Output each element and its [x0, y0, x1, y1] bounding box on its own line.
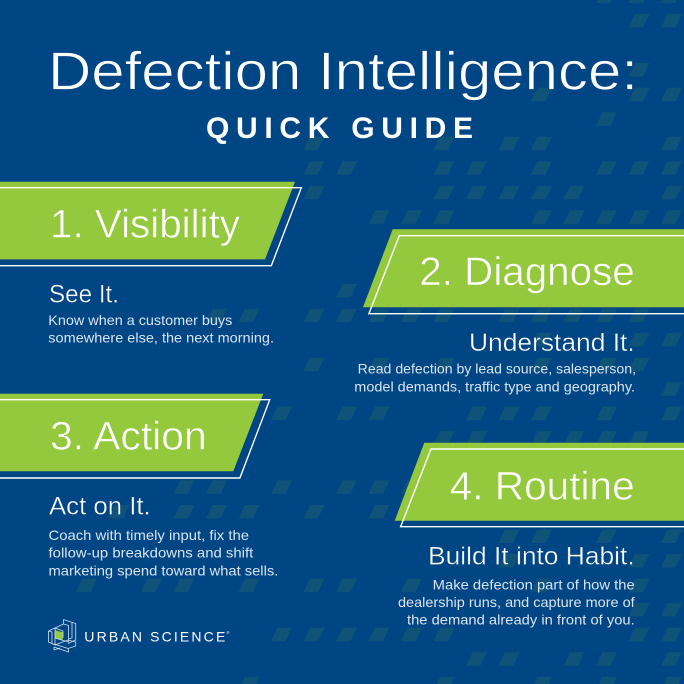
heading: 3. Action: 3. Action [50, 414, 207, 458]
banner: action [0, 394, 270, 478]
icon: Urban Science mark [48, 620, 76, 652]
banner: diagnose [363, 229, 684, 314]
registered mark: ® [226, 630, 230, 635]
body text: diagnose [354, 361, 636, 394]
heading: 2. Diagnose: 2. Diagnose [419, 250, 635, 294]
heading: 1. Visibility: 1. Visibility [50, 202, 240, 246]
subheading: Build It into Habit.: Build It into Habit. [428, 542, 635, 570]
subtitle: QUICK GUIDE [206, 112, 473, 145]
body text: routine [398, 576, 635, 628]
body text: routine: Make defection part of how the [433, 576, 635, 592]
body text: action [48, 527, 278, 578]
body text: routine: the demand already in front of you. [407, 612, 635, 628]
panel: 2. Diagnose [354, 229, 684, 394]
body text: action: follow-up breakdowns and shift [48, 545, 253, 561]
heading: 4. Routine: 4. Routine [450, 464, 635, 508]
body text: diagnose: Read defection by lead source, salesperson, [358, 361, 636, 377]
body text: visibility: somewhere else, the next morning. [48, 330, 274, 346]
wordmark: URBAN SCIENCE [84, 629, 225, 645]
body text: visibility [48, 312, 274, 346]
body text: routine: dealership runs, and capture more of [398, 594, 635, 610]
body text: action: marketing spend toward what sells. [48, 562, 278, 578]
banner: routine [395, 443, 684, 527]
body text: diagnose: model demands, traffic type and geography. [354, 378, 635, 394]
logo: Urban Science [48, 620, 230, 652]
panel: 1. Visibility [0, 182, 301, 346]
subheading: Understand It.: Understand It. [469, 329, 635, 357]
subheading: Act on It.: Act on It. [49, 492, 151, 520]
body text: visibility: Know when a customer buys [48, 312, 232, 328]
panel: 3. Action [0, 394, 278, 578]
title [48, 41, 638, 145]
panel: 4. Routine [395, 443, 684, 628]
subheading: See It.: See It. [49, 281, 119, 309]
banner: visibility [0, 182, 301, 266]
title: Defection Intelligence: [48, 41, 638, 101]
body text: action: Coach with timely input, fix the [48, 527, 249, 543]
